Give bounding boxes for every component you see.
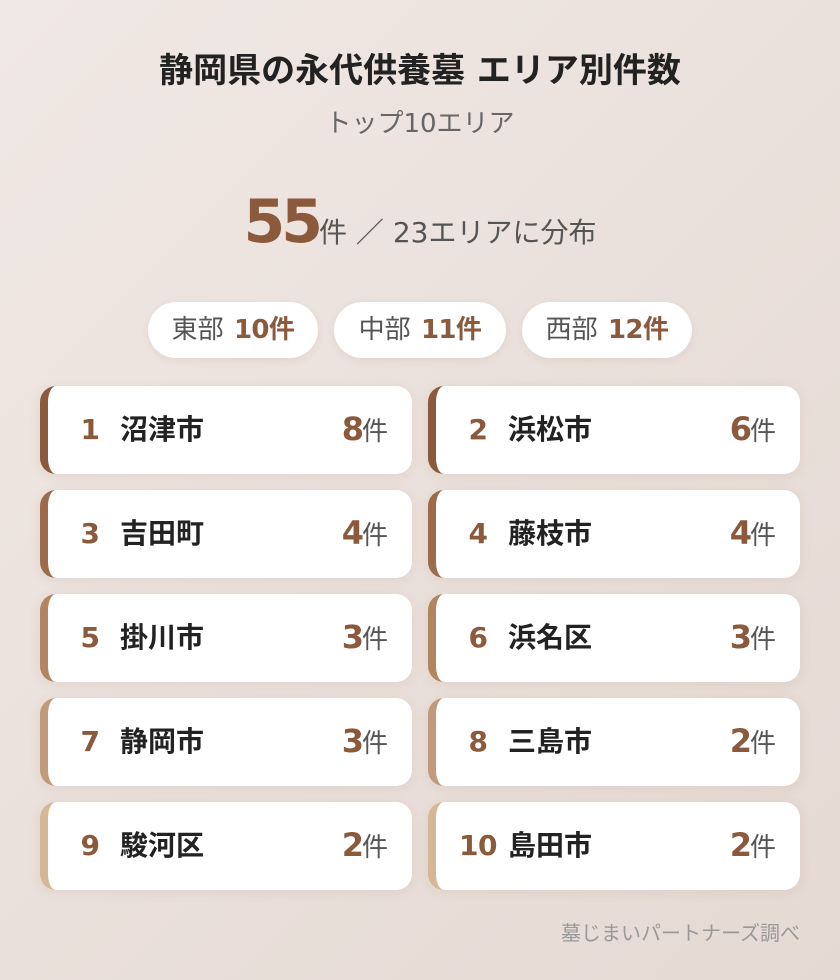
card: rank 9: 2件 bbox=[342, 826, 388, 864]
card: rank 6 bbox=[428, 594, 800, 682]
card: rank 10: 10 bbox=[459, 829, 497, 862]
title: 静岡県の永代供養墓 エリア別件数 bbox=[159, 51, 681, 91]
card: rank 1: 8件 bbox=[342, 410, 388, 448]
pill: central region: 中部 11件 bbox=[359, 315, 481, 345]
card: rank 10 bbox=[428, 802, 800, 890]
pill: east region: 東部 10件 bbox=[172, 315, 294, 345]
card: rank 3: 4件 bbox=[342, 514, 388, 552]
card: rank 4: 4件 bbox=[730, 514, 776, 552]
source note: 墓じまいパートナーズ調べ bbox=[561, 921, 800, 945]
card: rank 10: 2件 bbox=[730, 826, 776, 864]
card: rank 2: 2 bbox=[468, 413, 487, 446]
total summary: 55件 ／ 23エリアに分布 bbox=[244, 187, 596, 257]
card: rank 5 bbox=[40, 594, 412, 682]
card: rank 3 bbox=[40, 490, 412, 578]
pill: central region bbox=[334, 302, 506, 358]
pill: west region: 西部 12件 bbox=[546, 315, 668, 345]
card: rank 8: 三島市 bbox=[508, 725, 592, 758]
card: rank 7: 7 bbox=[80, 725, 99, 758]
card: rank 5: 5 bbox=[80, 621, 99, 654]
card: rank 8: 2件 bbox=[730, 722, 776, 760]
card: rank 7 bbox=[40, 698, 412, 786]
subtitle: トップ10エリア bbox=[325, 109, 515, 139]
card: rank 1 bbox=[40, 386, 412, 474]
card: rank 9: 9 bbox=[80, 829, 99, 862]
card: rank 8 bbox=[428, 698, 800, 786]
card: rank 1: 沼津市 bbox=[120, 413, 204, 446]
card: rank 3: 吉田町 bbox=[120, 517, 204, 550]
card: rank 3: 3 bbox=[80, 517, 99, 550]
card: rank 10: 島田市 bbox=[508, 829, 592, 862]
pill: east region bbox=[148, 302, 318, 358]
card: rank 2 bbox=[428, 386, 800, 474]
card: rank 4 bbox=[428, 490, 800, 578]
card: rank 2: 6件 bbox=[730, 410, 776, 448]
card: rank 4: 4 bbox=[468, 517, 487, 550]
card: rank 7: 静岡市 bbox=[120, 725, 204, 758]
card: rank 2: 浜松市 bbox=[508, 413, 592, 446]
card: rank 5: 掛川市 bbox=[120, 621, 204, 654]
card: rank 5: 3件 bbox=[342, 618, 388, 656]
card: rank 1: 1 bbox=[80, 413, 99, 446]
pill: west region bbox=[522, 302, 692, 358]
card: rank 6: 浜名区 bbox=[508, 621, 592, 654]
card: rank 9: 駿河区 bbox=[120, 829, 204, 862]
card: rank 6: 3件 bbox=[730, 618, 776, 656]
card: rank 6: 6 bbox=[468, 621, 487, 654]
card: rank 9 bbox=[40, 802, 412, 890]
card: rank 4: 藤枝市 bbox=[508, 517, 592, 550]
card: rank 8: 8 bbox=[468, 725, 487, 758]
card: rank 7: 3件 bbox=[342, 722, 388, 760]
